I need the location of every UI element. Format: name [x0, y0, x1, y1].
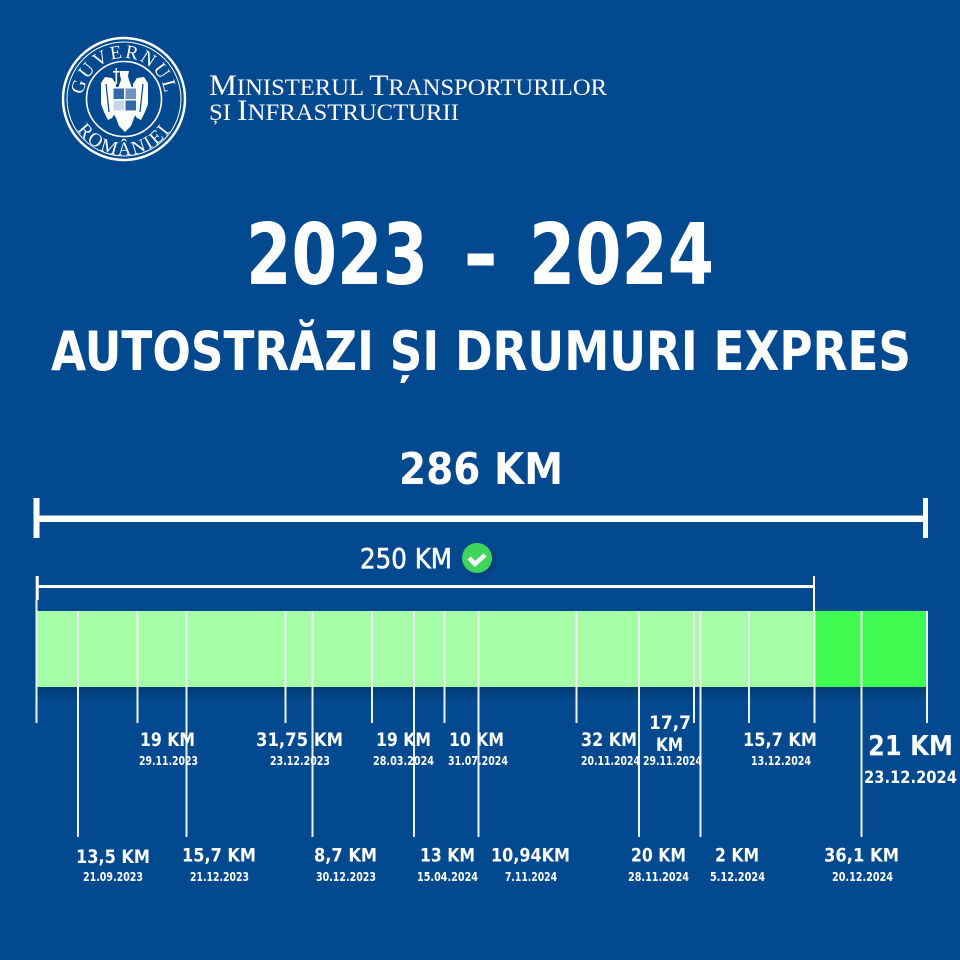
long tick marks: [77, 611, 862, 837]
label: 15,7 KM 13.12.2024: [743, 730, 817, 768]
ministry name: MINISTERUL TRANSPORTURILOR: [209, 69, 607, 102]
label: 13,5 KM 21.09.2023: 21.09.2023: [83, 869, 143, 884]
label: 19 KM 28.03.2024: [373, 730, 434, 768]
label: 31,75 KM 23.12.2023: [256, 730, 343, 768]
label: 13 KM 15.04.2024: [417, 846, 478, 884]
label: 17,7 KM 29.11.2024: 17,7: [649, 713, 691, 734]
label: 21 KM 23.12.2024: [864, 730, 957, 788]
label: 10 KM 31.07.2024: 10 KM: [449, 730, 504, 751]
label: 20 KM 28.11.2024: 20 KM: [631, 846, 686, 866]
label: 15,7 KM 13.12.2024: 15,7 KM: [743, 730, 817, 751]
logo: government seal: [62, 36, 186, 162]
label: 19 KM 28.03.2024: 19 KM: [376, 730, 431, 751]
label: 8,7 KM 30.12.2023: [314, 846, 377, 884]
label: 20 KM 28.11.2024: [628, 846, 689, 884]
ministry name: [209, 69, 607, 127]
label: 19 KM 29.11.2023: 19 KM: [140, 730, 195, 751]
label: 15,7 KM 21.12.2023: 21.12.2023: [190, 869, 249, 884]
label: 36,1 KM 20.12.2024: [824, 846, 899, 884]
label: 8,7 KM 30.12.2023: 8,7 KM: [314, 846, 377, 866]
label: 10,94 KM 7.11.2024: 10,94KM: [491, 846, 570, 866]
completed length label with check icon: 250 KM: [360, 542, 452, 575]
total length bracket: [34, 498, 928, 538]
label: 32 KM 20.11.2024: 32 KM: [581, 730, 637, 751]
logo: government seal: GUVERNUL: [72, 45, 176, 93]
label: 13,5 KM 21.09.2023: [76, 847, 150, 884]
label: 31,75 KM 23.12.2023: 31,75 KM: [256, 730, 343, 751]
label: 13 KM 15.04.2024: 15.04.2024: [417, 869, 478, 884]
label: 10 KM 31.07.2024: [448, 730, 508, 768]
label: 10,94 KM 7.11.2024: [491, 846, 570, 884]
label: 13 KM 15.04.2024: 13 KM: [420, 846, 475, 866]
title: years: [246, 206, 714, 305]
total length label: 286 KM: [399, 444, 563, 495]
title: years: 2023: [246, 206, 428, 305]
label: 20 KM 28.11.2024: 28.11.2024: [628, 869, 689, 884]
label: 36,1 KM 20.12.2024: 36,1 KM: [824, 846, 899, 866]
label: 17,7 KM 29.11.2024: 29.11.2024: [643, 753, 702, 768]
label: 15,7 KM 21.12.2023: 15,7 KM: [182, 846, 256, 866]
label: 17,7 KM 29.11.2024: [643, 713, 702, 768]
label: 19 KM 29.11.2023: 29.11.2023: [139, 753, 198, 768]
label: 32 KM 20.11.2024: [581, 730, 640, 768]
logo: government seal: ROMÂNIEI: [77, 122, 170, 156]
label: 8,7 KM 30.12.2023: 30.12.2023: [316, 869, 376, 884]
label: 2 KM 5.12.2024: 5.12.2024: [710, 869, 765, 884]
label: 36,1 KM 20.12.2024: 20.12.2024: [832, 869, 893, 884]
completed length bracket: [36, 576, 815, 611]
label: 31,75 KM 23.12.2023: 23.12.2023: [270, 753, 330, 768]
label: 15,7 KM 21.12.2023: [182, 846, 256, 884]
progress bar: [36, 611, 927, 701]
label: 10,94 KM 7.11.2024: 7.11.2024: [505, 869, 557, 884]
label: 19 KM 28.03.2024: 28.03.2024: [373, 753, 434, 768]
ministry name: ȘI INFRASTRUCTURII: [209, 94, 459, 127]
label: 17,7 KM 29.11.2024: KM: [656, 735, 683, 756]
title: years: 2024: [529, 206, 714, 305]
label: 10 KM 31.07.2024: 31.07.2024: [448, 753, 508, 768]
label: 19 KM 29.11.2023: [139, 730, 198, 768]
label: 2 KM 5.12.2024: 2 KM: [715, 846, 759, 866]
label: 2 KM 5.12.2024: [710, 846, 765, 884]
short tick marks: [36, 600, 928, 723]
label: 15,7 KM 13.12.2024: 13.12.2024: [751, 753, 811, 768]
title: years: -: [463, 206, 498, 305]
label: 13,5 KM 21.09.2023: 13,5 KM: [76, 847, 150, 868]
label: 32 KM 20.11.2024: 20.11.2024: [581, 753, 640, 768]
